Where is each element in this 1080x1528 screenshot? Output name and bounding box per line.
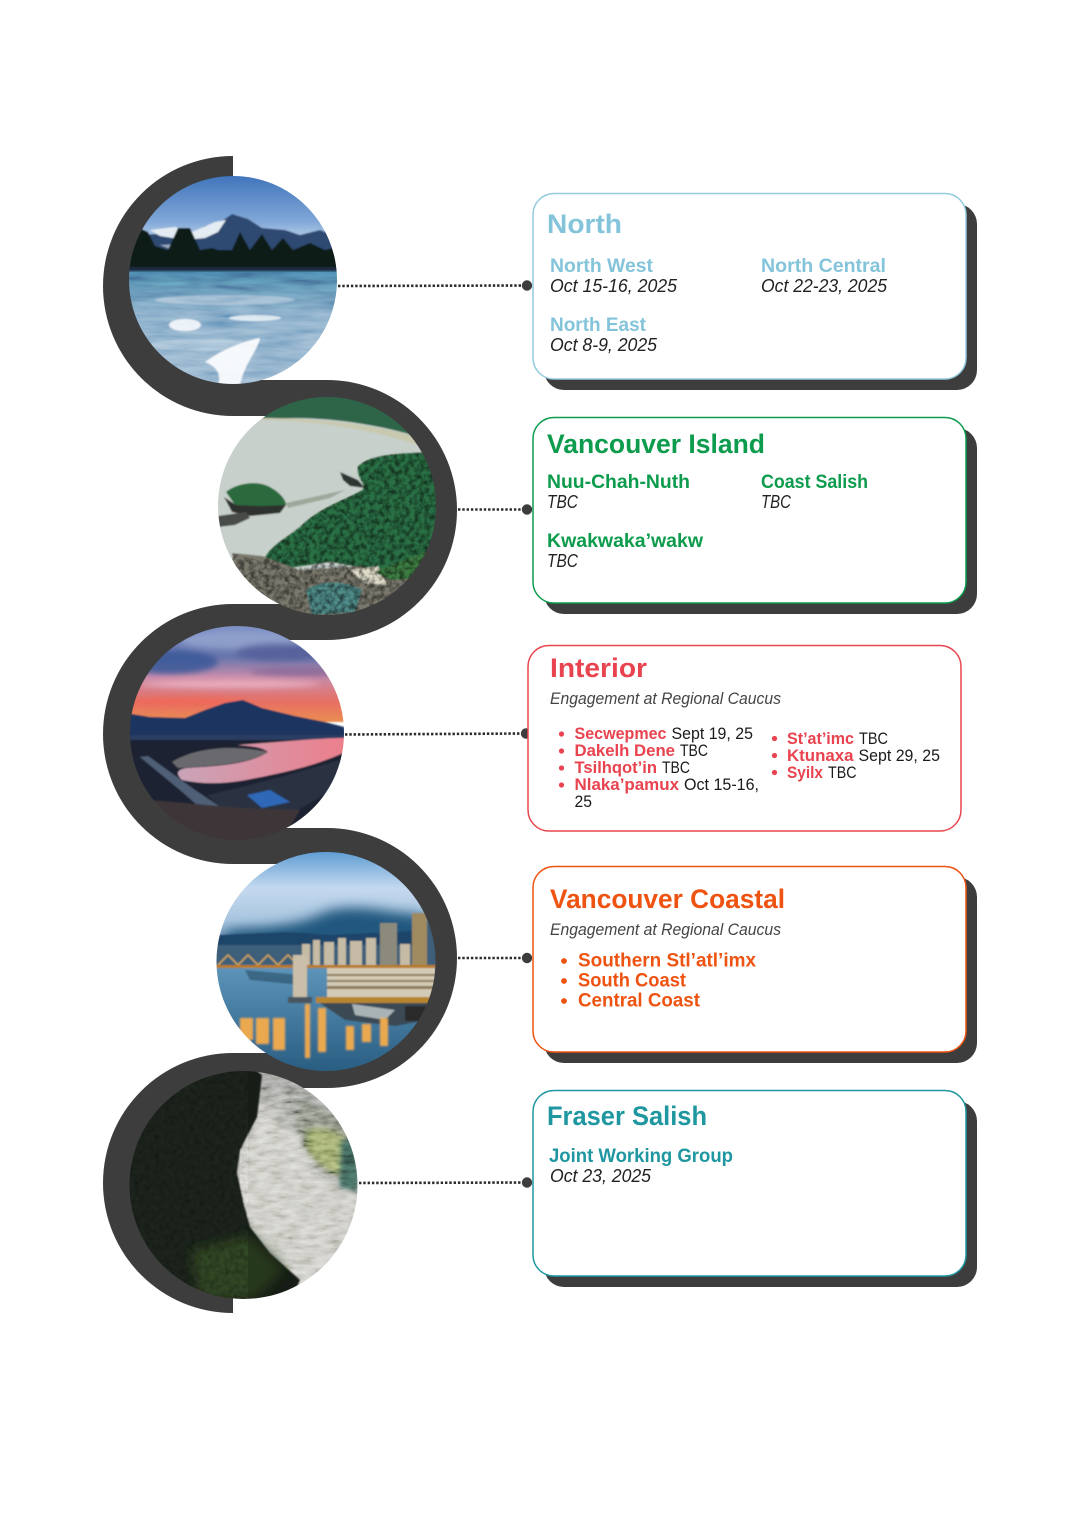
item: North West: Oct 15-16, 2025 bbox=[550, 275, 678, 296]
serpentine dark band bbox=[103, 156, 457, 1313]
item: Coast Salish: TBC bbox=[761, 491, 792, 512]
card body: Vancouver Island bbox=[533, 418, 966, 603]
list: right column: TBC bbox=[828, 764, 857, 782]
list: Vancouver Coastal: Central Coast bbox=[578, 990, 701, 1012]
photo: mountain river bbox=[125, 172, 341, 386]
photo: waterfall forest bbox=[125, 1068, 360, 1302]
list: Vancouver Coastal bbox=[561, 950, 756, 1012]
panel: Fraser Salish bbox=[533, 1090, 977, 1287]
item: Coast Salish: Coast Salish bbox=[761, 472, 868, 493]
card body: Interior bbox=[528, 646, 961, 831]
photo: interior sunset bbox=[130, 626, 344, 828]
item: Kwakwaka'wakw: Kwakwaka’wakw bbox=[547, 531, 703, 552]
list: left column bbox=[559, 725, 759, 811]
list: left column: Oct 15-16, bbox=[684, 776, 759, 794]
connector: North bbox=[338, 280, 532, 291]
card body: Vancouver Coastal bbox=[533, 866, 966, 1052]
panel: Vancouver Coastal bbox=[533, 866, 977, 1063]
list: right column: Ktunaxa bbox=[787, 747, 854, 765]
heading: North: North bbox=[547, 209, 622, 239]
item: Kwakwaka'wakw: TBC bbox=[547, 550, 579, 571]
item: North East bbox=[550, 315, 658, 355]
list: left column: 25 bbox=[574, 793, 592, 811]
list: right column bbox=[772, 730, 940, 782]
texture: dark trees bbox=[128, 1068, 248, 1302]
list: left column: TBC bbox=[680, 742, 708, 760]
card shadow: Vancouver Coastal bbox=[544, 877, 977, 1063]
item: Nuu-Chah-Nuth: Nuu-Chah-Nuth bbox=[547, 472, 690, 493]
list: right column: TBC bbox=[859, 730, 888, 748]
item: North East: North East bbox=[550, 315, 647, 336]
list: right column: Syilx bbox=[787, 764, 824, 782]
item: North Central: North Central bbox=[761, 256, 886, 277]
item: North West: North West bbox=[550, 256, 654, 277]
item: North Central bbox=[761, 256, 888, 296]
heading: Vancouver Coastal: Vancouver Coastal bbox=[550, 884, 785, 914]
card shadow: Vancouver Island bbox=[544, 428, 977, 614]
texture: water streaks bbox=[125, 272, 341, 386]
item: Kwakwaka'wakw bbox=[547, 531, 703, 571]
list: right column: Sept 29, 25 bbox=[858, 747, 940, 765]
photo: vancouver city bbox=[214, 850, 438, 1078]
panel: Interior bbox=[528, 646, 961, 831]
subtitle: Interior: Engagement at Regional Caucus bbox=[550, 690, 781, 708]
photo: island coast bbox=[215, 394, 442, 622]
list: left column: Secwepmec bbox=[574, 725, 666, 743]
card shadow: Fraser Salish bbox=[544, 1101, 977, 1287]
card body: Fraser Salish bbox=[533, 1090, 966, 1276]
panel: North bbox=[533, 194, 977, 390]
texture: forest canopy bbox=[230, 450, 442, 622]
card body: North bbox=[533, 194, 966, 379]
item: North Central: Oct 22-23, 2025 bbox=[761, 275, 888, 296]
connector: Vancouver Coastal bbox=[458, 953, 532, 963]
connector: Vancouver Island bbox=[458, 504, 532, 515]
list: left column: Tsilhqot’in bbox=[574, 759, 657, 777]
item: Nuu-Chah-Nuth: TBC bbox=[547, 491, 579, 512]
heading: Vancouver Island: Vancouver Island bbox=[547, 429, 765, 459]
item: North East: Oct 8-9, 2025 bbox=[550, 334, 658, 355]
list: left column: Sept 19, 25 bbox=[672, 725, 753, 743]
list: right column: St’at’imc bbox=[787, 730, 854, 748]
item: Coast Salish bbox=[761, 472, 868, 512]
heading: Interior: Interior bbox=[550, 653, 647, 683]
item: Joint Working Group bbox=[549, 1146, 733, 1186]
list: left column: Nlaka’pamux bbox=[574, 776, 680, 794]
panel: Vancouver Island bbox=[533, 418, 977, 614]
item: North West bbox=[550, 256, 678, 296]
item: Joint Working Group: Joint Working Group bbox=[549, 1146, 733, 1167]
list: Vancouver Coastal: South Coast bbox=[578, 970, 687, 992]
connector: Interior bbox=[345, 728, 531, 739]
list: left column: Dakelh Dene bbox=[574, 742, 675, 760]
heading: Fraser Salish: Fraser Salish bbox=[547, 1101, 707, 1131]
subtitle: Vancouver Coastal: Engagement at Regional Caucus bbox=[550, 921, 781, 939]
item: Joint Working Group: Oct 23, 2025 bbox=[550, 1165, 652, 1186]
item: Nuu-Chah-Nuth bbox=[547, 472, 690, 512]
list: Vancouver Coastal: Southern Stl’atl’imx bbox=[578, 950, 756, 972]
connector: Fraser Salish bbox=[359, 1177, 532, 1188]
list: left column: TBC bbox=[662, 759, 690, 777]
card shadow: North bbox=[544, 204, 977, 390]
